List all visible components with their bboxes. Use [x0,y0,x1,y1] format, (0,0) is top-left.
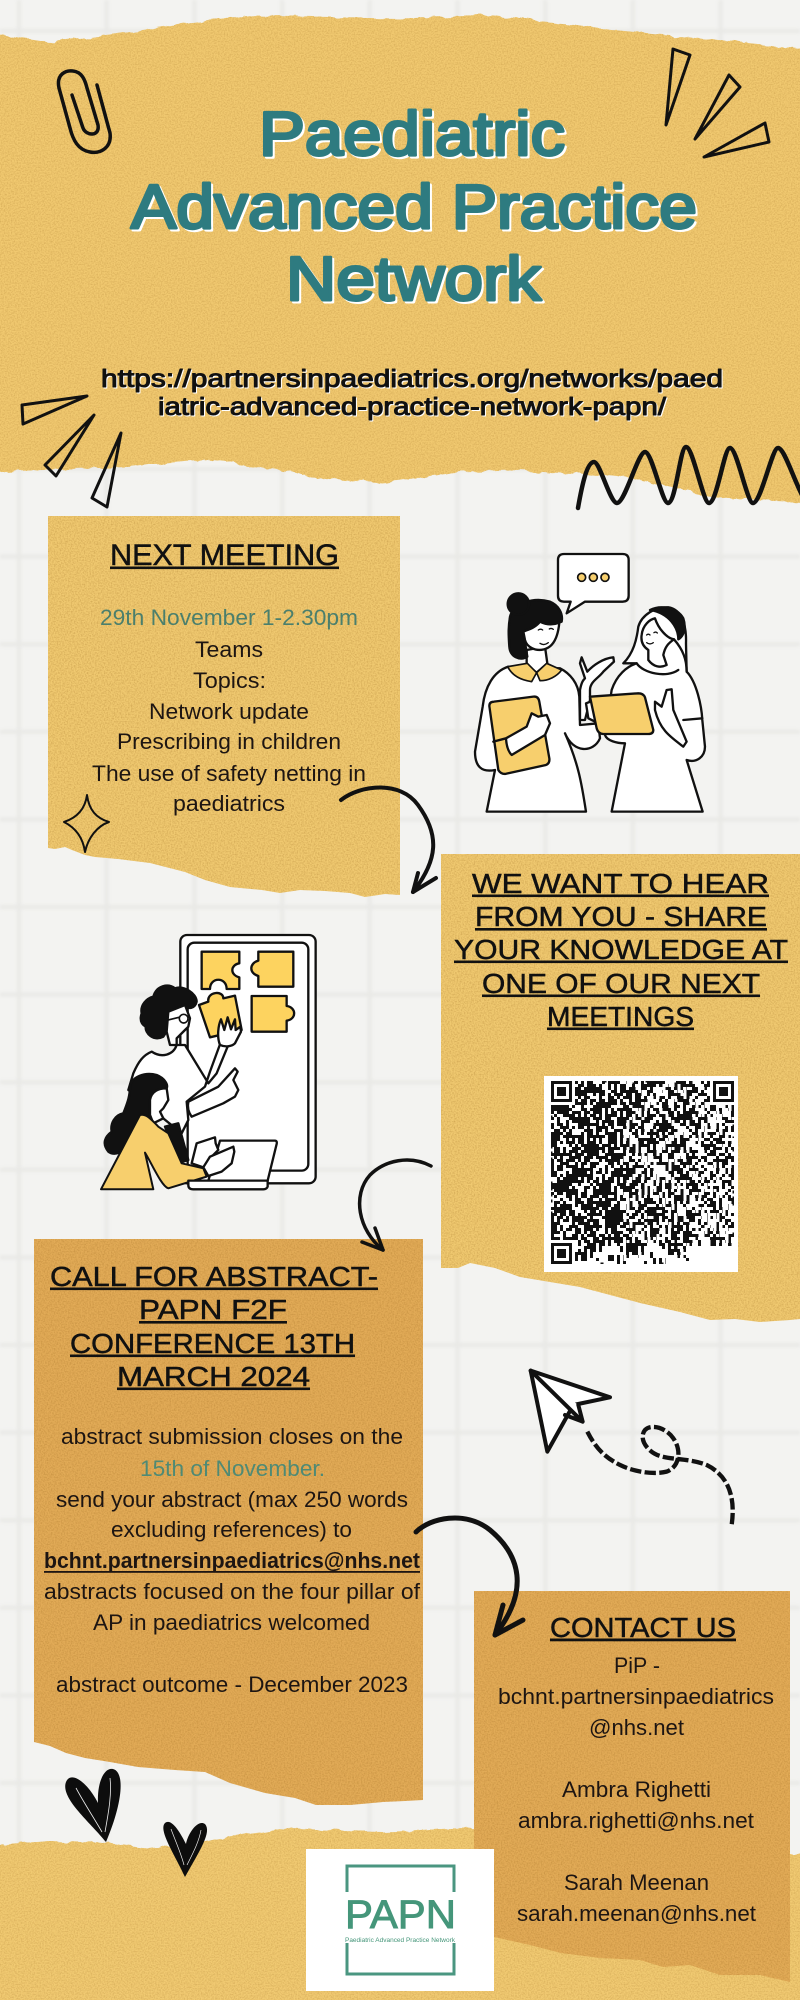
man with glasses [128,986,241,1133]
meeting details: The use of safety netting in [92,761,366,786]
puzzle pieces [199,952,294,1037]
title: Advanced Practice [131,173,697,242]
abstract details: abstract submission closes on the [61,1424,403,1449]
logo: PAPN: PAPN [345,1893,456,1937]
heading: share your knowledge [454,868,788,1032]
heading: share your knowledge: MEETINGS [547,1001,694,1032]
meeting details: Topics: [193,668,266,693]
panel: call for abstract [34,1239,423,1805]
icon: top right spark lines [666,49,769,157]
panel: next meeting [48,516,400,897]
heading: share your knowledge: WE WANT TO HEAR [472,868,769,899]
heading: contact us: CONTACT US [550,1612,736,1643]
title [131,100,697,314]
abstract details: abstract outcome - December 2023 [56,1672,408,1697]
abstract details: AP in paediatrics welcomed [93,1610,370,1635]
icon: sparkle [64,795,109,852]
network web address: https://partnersinpaediatrics.org/networks/paed [101,365,723,393]
logo: PAPN: Paediatric Advanced Practice Network [345,1937,456,1944]
logo: PAPN [306,1849,494,1991]
arrow: abstract panel to contact us [416,1518,523,1635]
heading: call for abstract: MARCH 2024 [117,1361,310,1392]
icon: paper clip [58,71,110,152]
heading: call for abstract: PAPN F2F [139,1294,287,1325]
heading: call for abstract [50,1261,378,1392]
contact details [498,1653,774,1926]
icon: bottom left spark lines [22,396,121,507]
woman with clipboard on left [475,593,614,812]
network web address [101,365,723,421]
paper: share your knowledge [441,854,800,1322]
abstract details: abstracts focused on the four pillar of [44,1579,421,1604]
heading: share your knowledge: ONE OF OUR NEXT [482,968,760,999]
tablet and hand [586,693,653,734]
icon: paper plane with dashed trail [531,1371,733,1525]
panel: bottom contact paper [474,1591,790,1982]
phone board [180,935,316,1183]
abstract details: excluding references) to [111,1517,352,1542]
woman with laptop [101,1074,277,1189]
abstract details: bchnt.partnersinpaediatrics@nhs.net [44,1548,421,1573]
paper: next meeting [48,516,400,897]
heading: share your knowledge: YOUR KNOWLEDGE AT [454,934,788,965]
illustration: two women talking [475,554,705,812]
contact details: sarah.meenan@nhs.net [517,1901,756,1926]
woman with tablet on right [605,607,705,812]
QR code [544,1076,738,1272]
paper plane [531,1371,610,1452]
meeting details [92,605,366,816]
panel: torn top banner [0,15,800,503]
meeting details: paediatrics [173,791,285,816]
contact details: ambra.righetti@nhs.net [518,1808,754,1833]
heading: share your knowledge: FROM YOU - SHARE [475,901,767,932]
contact details: Ambra Righetti [562,1777,711,1802]
panel: share your knowledge [441,854,800,1322]
contact details: bchnt.partnersinpaediatrics [498,1684,774,1709]
meeting details: Network update [149,699,309,724]
icon: zigzag scribble [578,447,800,508]
contact details: PiP - [614,1653,660,1678]
icon: small heart [163,1822,207,1877]
icon: large heart [65,1769,121,1842]
meeting details: 29th November 1-2.30pm [100,605,358,630]
contact details: @nhs.net [589,1715,684,1740]
paper: call for abstract [34,1239,423,1805]
abstract details: 15th of November. [140,1456,325,1481]
paper: contact us [474,1591,790,1982]
heading: call for abstract: CALL FOR ABSTRACT- [50,1261,378,1292]
network web address: iatric-advanced-practice-network-papn/ [158,393,666,421]
illustration: two people with puzzle board [101,935,316,1189]
meeting details: Teams [195,637,263,662]
abstract details: send your abstract (max 250 words [56,1487,408,1512]
arrow: next meeting to share your knowledge [341,788,436,892]
dashed flight trail [587,1427,733,1525]
contact details: Sarah Meenan [564,1870,709,1895]
arrow: share your knowledge to abstract panel [360,1160,431,1250]
speech bubble [558,554,629,613]
panel: torn bottom banner [0,1828,800,2000]
abstract details [44,1424,421,1697]
title: Network [286,245,542,314]
heading: next meeting: NEXT MEETING [110,539,339,572]
heading: call for abstract: CONFERENCE 13TH [70,1328,355,1359]
title: Paediatric [259,100,565,169]
meeting details: Prescribing in children [117,729,341,754]
